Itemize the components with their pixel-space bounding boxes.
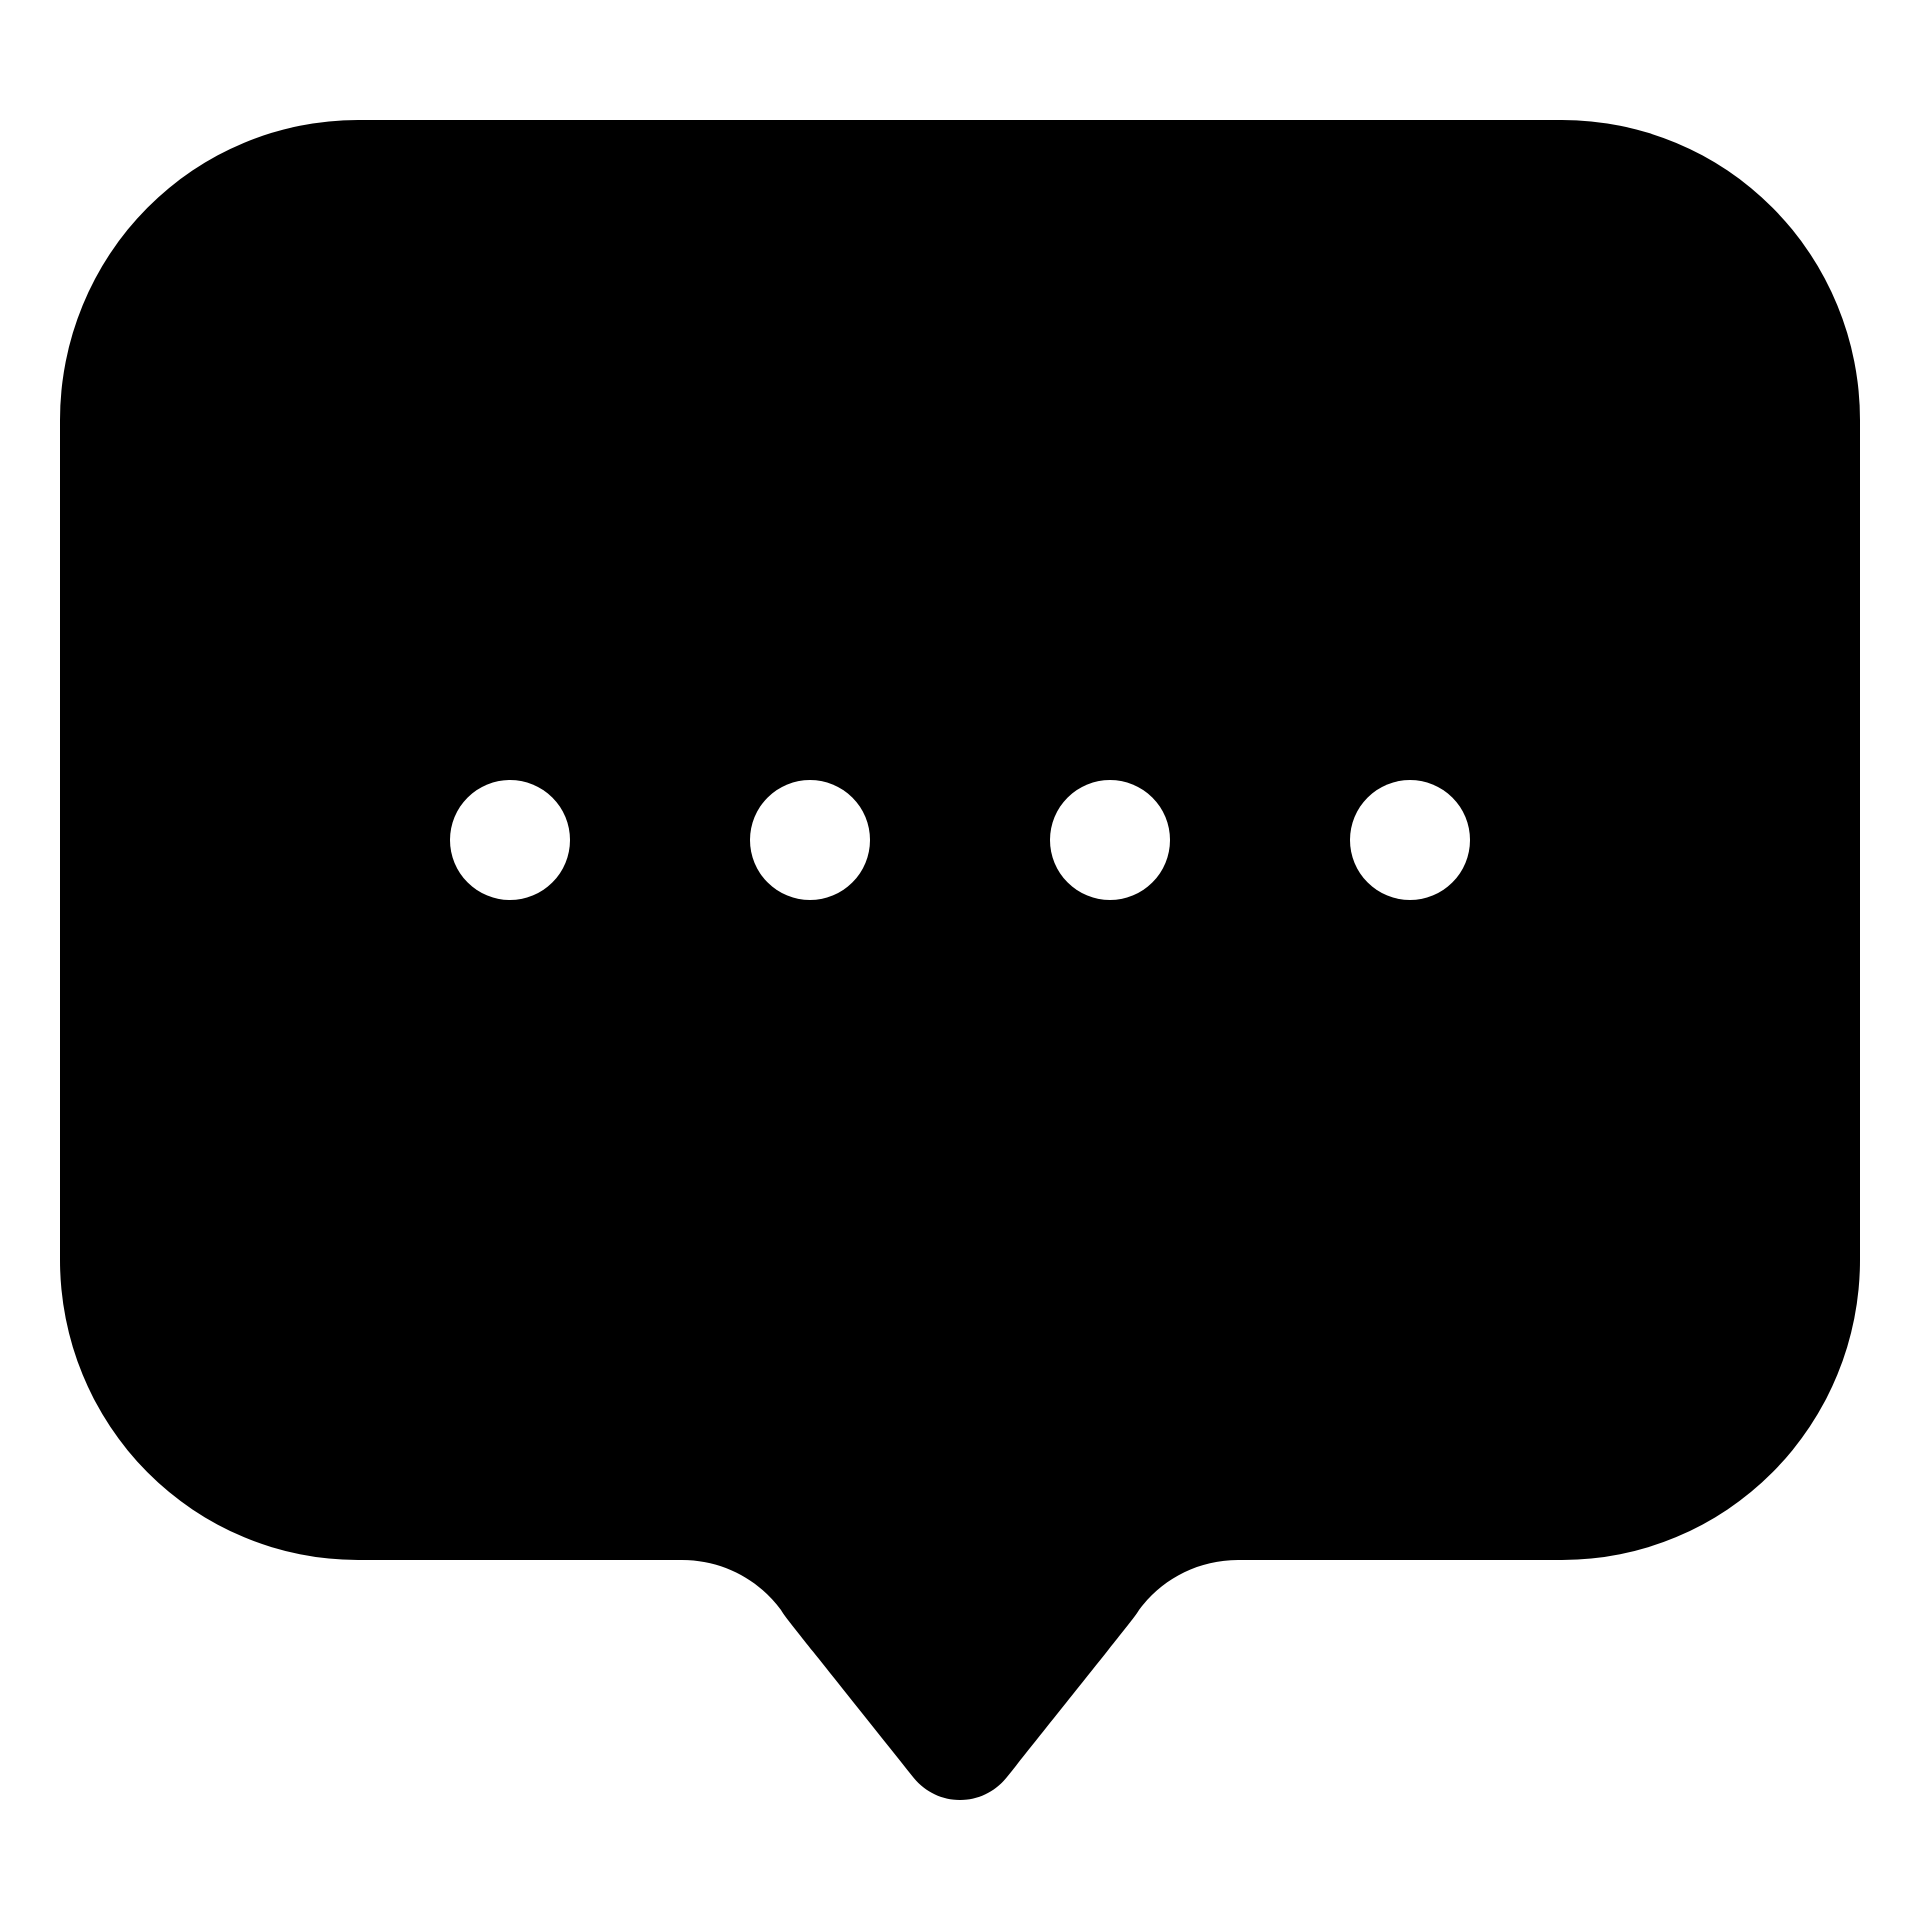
dot 3 xyxy=(1050,780,1170,900)
dot 2 xyxy=(750,780,870,900)
dot 1 xyxy=(450,780,570,900)
dot 4 xyxy=(1350,780,1470,900)
